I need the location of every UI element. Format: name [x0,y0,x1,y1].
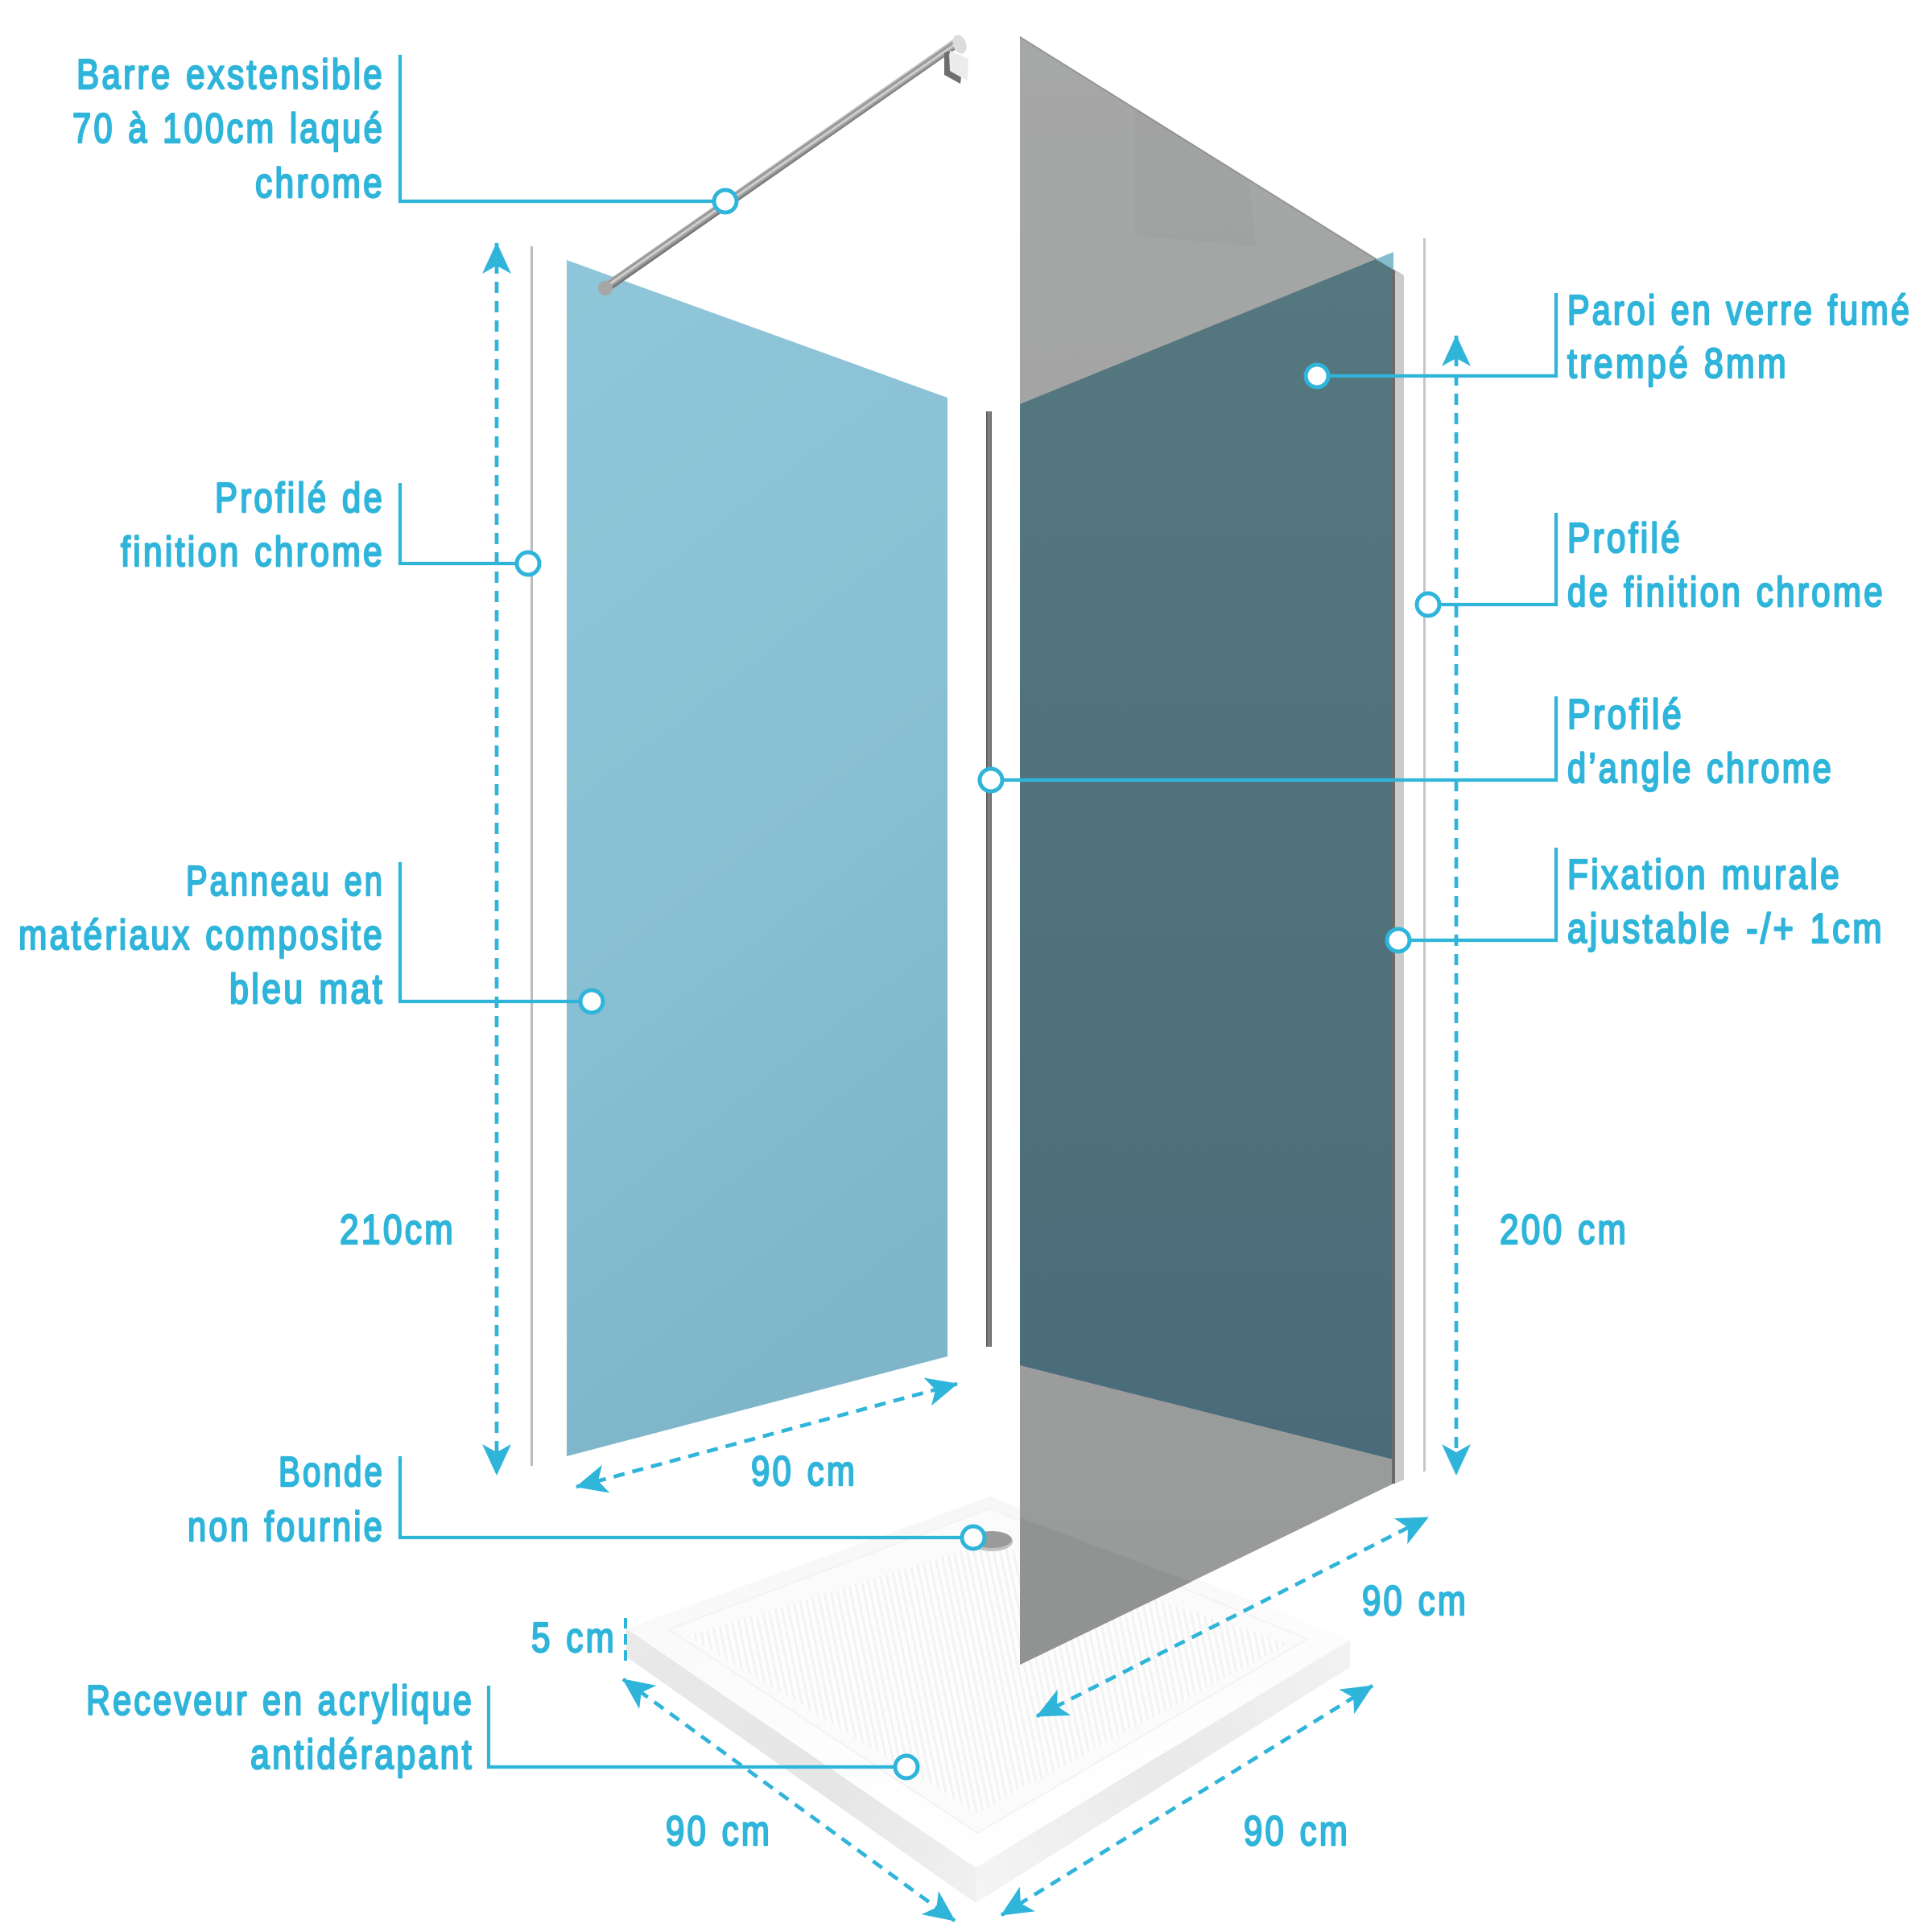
text: Profilé [1567,691,1684,738]
text [1567,515,1885,616]
text: finition chrome [121,529,385,576]
text: Panneau en [186,858,385,905]
text [1567,691,1834,792]
callout: bar [72,52,737,213]
top glass edge [1020,37,1403,276]
callout: left profile [121,475,539,576]
label: panel 90 cm: 90 cm [751,1448,857,1495]
bar glass bracket [944,51,968,84]
marker [580,990,603,1013]
glass edge dark [1392,270,1395,1484]
leader [400,862,592,1001]
smoked glass panel [1020,37,1404,1665]
dimension: tray right side [1001,1686,1373,1915]
leader [400,1456,973,1538]
text: Receveur en acrylique [86,1678,474,1724]
marker [1306,365,1328,387]
marker [895,1756,918,1778]
dimension: tray height mark [624,1618,627,1666]
text [1567,287,1912,387]
marker [714,190,737,213]
leader [1398,848,1556,940]
text [86,1678,474,1778]
callout: corner profile [980,691,1834,792]
text: Bonde [279,1449,385,1496]
leader [991,696,1556,780]
bar wall cap [950,33,969,56]
text: d’angle chrome [1567,745,1834,792]
dimension: left height [495,243,498,1475]
tray inner basin [669,1509,1307,1833]
leader [400,55,724,201]
blue panel corner above the glass [1376,252,1393,270]
text: 70 à 100cm laqué [72,105,385,152]
text: Fixation murale [1567,852,1842,898]
label: 200 cm: 200 cm [1500,1207,1629,1253]
shower tray [626,1496,1350,1903]
label: 210cm: 210cm [340,1207,456,1253]
text [72,52,385,207]
dimension: right height [1455,336,1458,1475]
text [121,475,385,576]
callout: wall fixing [1387,848,1885,952]
marker [517,552,539,575]
text: bleu mat [229,966,385,1013]
text: matériaux composite [19,912,385,959]
tray left side face [626,1629,976,1903]
extensible bar [598,33,969,295]
callout: glass [1306,287,1912,387]
marker [1387,929,1410,952]
marker [962,1526,985,1549]
tray seen through the glass [1020,1517,1191,1665]
tray right side face [976,1640,1350,1903]
label: tray left 90 cm: 90 cm [666,1808,772,1855]
callout: tray [86,1678,918,1778]
marker [980,769,1002,791]
label: tray right 90 cm: 90 cm [1244,1808,1350,1855]
leader [1317,293,1556,376]
text: antidérapant [250,1732,474,1778]
leader [400,483,528,564]
dimension: tray left side [623,1679,955,1921]
left finishing profile [530,246,533,1466]
right finishing profile [1423,238,1426,1472]
callout: blue panel [19,858,603,1013]
glass edge light [1395,270,1404,1484]
dimension: panel width [576,1384,957,1487]
glass reflection [1135,107,1256,246]
label: 5 cm: 5 cm [531,1615,617,1662]
corner profile [986,411,992,1347]
text: Profilé de [215,475,385,522]
label: glass 90 cm: 90 cm [1362,1578,1468,1624]
text [188,1449,385,1550]
callout: right profile [1417,513,1885,616]
text: Profilé [1567,515,1682,562]
blue panel seen through the glass [1020,259,1393,1459]
tray anti-slip surface [688,1542,1288,1813]
text [1567,852,1885,952]
leader [489,1686,906,1767]
text: chrome [255,160,385,207]
callout: drain [188,1449,985,1550]
blue composite panel [567,260,947,1456]
text: trempé 8mm [1567,341,1789,387]
bar end left [598,281,613,295]
clear glass area [1020,37,1393,1665]
marker [1417,593,1439,616]
dimension: glass width [1037,1517,1428,1716]
tray rim [626,1496,1350,1868]
text: non fournie [188,1504,385,1550]
text: Barre exstensible [76,52,385,98]
leader [1428,513,1556,605]
text [19,858,385,1013]
drain [971,1531,1013,1551]
